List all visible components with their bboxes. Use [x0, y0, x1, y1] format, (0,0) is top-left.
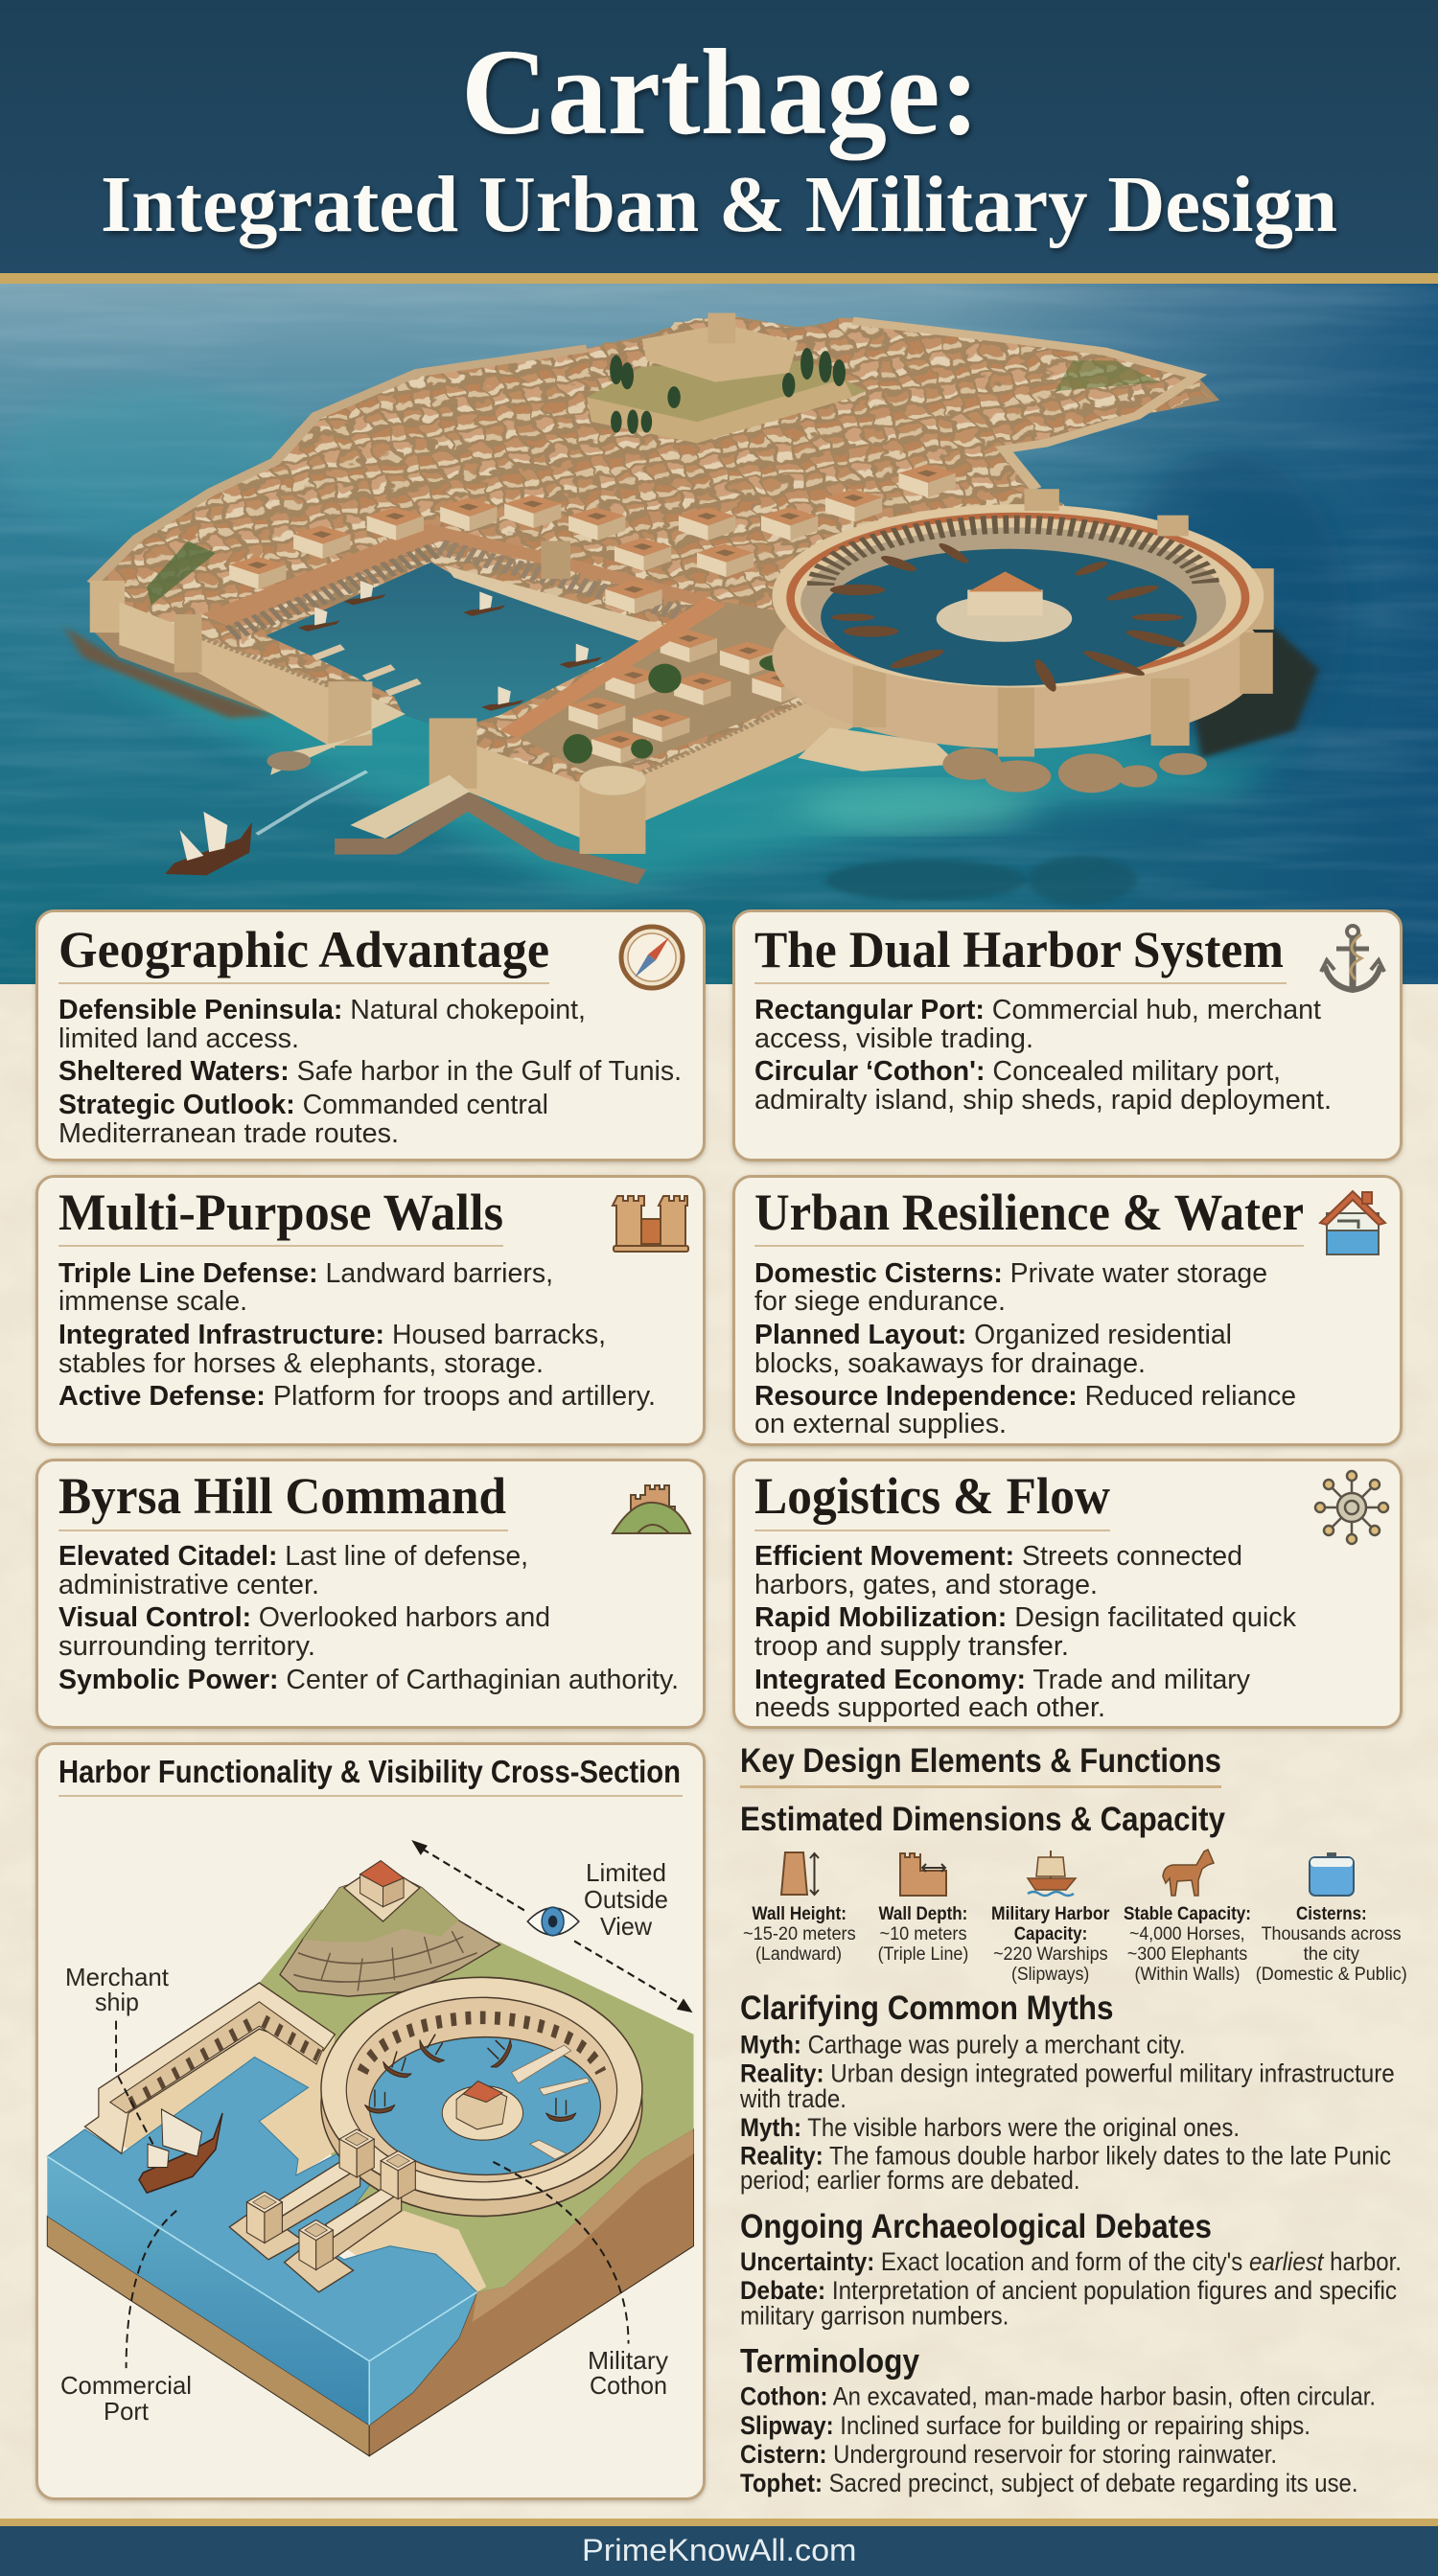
icon: castle walls — [613, 1196, 688, 1252]
south block and road — [518, 602, 848, 773]
icon: logistics wheel — [1315, 1471, 1388, 1544]
diagram labels: Merchant — [65, 1963, 170, 1991]
body text: Sheltered Waters: Safe harbor in the Gulf of Tunis. — [58, 1056, 682, 1087]
body text: Integrated Economy: Trade and military — [754, 1665, 1250, 1695]
body text: administrative center. — [58, 1570, 319, 1600]
section: terminology: Tophet: Sacred precinct, subject of debate regarding its use. — [740, 2469, 1357, 2497]
body text: Rectangular Port: Commercial hub, merchant — [754, 995, 1321, 1025]
body text: Efficient Movement: Streets connected — [754, 1541, 1242, 1572]
section: terminology: Cistern: Underground reservoir for storing rainwater. — [740, 2440, 1277, 2469]
diagram labels: View — [600, 1912, 652, 1941]
heading: Harbor Functionality & Visibility Cross-Section — [58, 1754, 681, 1789]
rocks — [942, 748, 1207, 793]
panel: urban resilience and water — [734, 1177, 1402, 1445]
citadel hill — [587, 360, 867, 443]
body text: on external supplies. — [754, 1409, 1007, 1439]
body text — [754, 1541, 1296, 1723]
rectangular port water — [266, 563, 679, 730]
body text: immense scale. — [58, 1286, 247, 1317]
hill — [280, 1872, 500, 1996]
metric: wall height — [743, 1852, 856, 1965]
section: ongoing archaeological debates: Ongoing Archaeological Debates — [740, 2208, 1212, 2245]
section: ongoing archaeological debates — [740, 2208, 1402, 2331]
panel: harbor cross-section — [36, 1744, 704, 2499]
diagram labels: Port — [104, 2397, 150, 2426]
panel: dual harbor system — [734, 910, 1402, 1160]
body text: needs supported each other. — [754, 1692, 1105, 1723]
heading: Geographic Advantage — [58, 921, 549, 978]
diagram labels: Military — [588, 2346, 668, 2375]
metric: cisterns: Cisterns: — [1296, 1904, 1367, 1924]
section: clarifying common myths: with trade. — [739, 2084, 847, 2113]
ships in port — [463, 591, 505, 616]
metric: wall depth: (Triple Line) — [878, 1944, 968, 1965]
diagram labels: Commercial — [60, 2371, 192, 2400]
leader lines — [116, 1849, 682, 2368]
body text — [58, 1258, 656, 1412]
body text: stables for horses & elephants, storage. — [58, 1348, 544, 1379]
merchant ship at sea — [257, 771, 367, 835]
heading: The Dual Harbor System — [754, 921, 1284, 978]
body text: admiralty island, ship sheds, rapid deployment. — [754, 1085, 1332, 1116]
body text — [58, 1541, 679, 1695]
diagram labels: Outside — [584, 1885, 668, 1914]
diagram labels: Limited — [586, 1858, 666, 1887]
commercial harbor walls — [85, 1983, 335, 2153]
gold band — [0, 273, 1438, 284]
ships in cothon — [830, 541, 1187, 693]
metric: stable capacity: (Within Walls) — [1135, 1965, 1241, 1985]
icon: compass — [621, 927, 683, 988]
body text: Active Defense: Platform for troops and artillery. — [58, 1381, 656, 1412]
body text — [58, 995, 682, 1149]
body text: Symbolic Power: Center of Carthaginian authority. — [58, 1665, 679, 1695]
body text: Elevated Citadel: Last line of defense, — [58, 1541, 528, 1572]
body text: Rapid Mobilization: Design facilitated quick — [754, 1602, 1296, 1633]
section: estimated dimensions — [740, 1801, 1407, 1985]
panel: byrsa hill command — [36, 1460, 704, 1727]
body text: Strategic Outlook: Commanded central — [58, 1090, 548, 1120]
diagram labels: Cothon — [590, 2371, 667, 2400]
subtitle: Integrated Urban & Military Design — [101, 160, 1337, 249]
admiralty island — [937, 595, 1072, 642]
hilltop building — [344, 1863, 420, 1921]
body text: troop and supply transfer. — [754, 1631, 1069, 1662]
terrain — [47, 2217, 369, 2456]
diagram labels — [60, 1858, 668, 2426]
section: terminology: Cothon: An excavated, man-made harbor basin, often circular. — [740, 2382, 1376, 2411]
body text: Circular ‘Cothon': Concealed military port, — [754, 1056, 1281, 1087]
metric: cisterns: the city — [1304, 1944, 1359, 1965]
body text: harbors, gates, and storage. — [754, 1570, 1098, 1600]
metric: wall height: ~15-20 meters — [743, 1924, 856, 1944]
parchment background — [0, 984, 1438, 2576]
section: ongoing archaeological debates: military garrison numbers. — [740, 2302, 1009, 2331]
section: clarifying common myths: Myth: Carthage was purely a merchant city. — [740, 2030, 1186, 2058]
section: key design elements heading: Key Design Elements & Functions — [740, 1742, 1221, 1780]
cothon — [772, 565, 1264, 748]
west walls and mole — [90, 581, 125, 632]
metric: wall depth — [878, 1853, 968, 1965]
metric: cisterns: (Domestic & Public) — [1256, 1965, 1407, 1985]
view arrowheads — [411, 1840, 693, 2012]
footer — [0, 2518, 1438, 2576]
body text: for siege endurance. — [754, 1286, 1006, 1317]
body text: limited land access. — [58, 1024, 299, 1054]
metric: stable capacity: Stable Capacity: — [1124, 1904, 1251, 1924]
cothon ships — [364, 2090, 395, 2113]
aerial illustration of Carthage — [0, 283, 1438, 984]
section: clarifying common myths: Clarifying Common Myths — [740, 1990, 1114, 2027]
metric: military harbor capacity: ~220 Warships — [993, 1944, 1108, 1965]
section: clarifying common myths — [739, 1990, 1395, 2195]
section: clarifying common myths: Myth: The visible harbors were the original ones. — [740, 2113, 1240, 2142]
body text: Integrated Infrastructure: Housed barracks, — [58, 1320, 606, 1350]
upper houses near harbors — [440, 498, 497, 531]
title: Carthage: — [461, 24, 980, 160]
sea — [47, 2058, 477, 2361]
panel: logistics and flow — [734, 1460, 1402, 1727]
metric: military harbor capacity — [991, 1851, 1110, 1985]
heading: Estimated Dimensions & Capacity — [740, 1801, 1225, 1838]
body text — [754, 995, 1332, 1116]
heading: Multi-Purpose Walls — [58, 1184, 503, 1241]
metric: wall height: (Landward) — [755, 1944, 842, 1965]
metric: wall depth: Wall Depth: — [878, 1904, 967, 1924]
heading: Byrsa Hill Command — [58, 1467, 506, 1525]
diagram labels: ship — [95, 1988, 139, 2016]
isometric harbor diagram — [47, 1840, 693, 2456]
body text: Triple Line Defense: Landward barriers, — [58, 1258, 553, 1289]
section: terminology — [740, 2342, 1376, 2497]
body text: access, visible trading. — [754, 1024, 1033, 1054]
panel: multi-purpose walls — [36, 1177, 704, 1445]
metric: wall depth: ~10 meters — [880, 1924, 966, 1944]
city land mass — [92, 314, 1238, 825]
metric: stable capacity: ~300 Elephants — [1127, 1944, 1247, 1965]
metric: wall height: Wall Height: — [752, 1904, 847, 1924]
cothon island — [442, 2086, 522, 2140]
body text: Planned Layout: Organized residential — [754, 1320, 1232, 1350]
metric: stable capacity: ~4,000 Horses, — [1129, 1924, 1245, 1944]
metric: cisterns: Thousands across — [1262, 1924, 1402, 1944]
metric: military harbor capacity: (Slipways) — [1011, 1965, 1089, 1985]
body text: Resource Independence: Reduced reliance — [754, 1381, 1296, 1412]
icon: hill citadel — [613, 1485, 690, 1533]
metric: cisterns — [1256, 1852, 1407, 1985]
section: ongoing archaeological debates: Uncertainty: Exact location and form of the city's earliest harbor. — [740, 2247, 1402, 2276]
metric: military harbor capacity: Capacity: — [1014, 1924, 1087, 1944]
heading: Urban Resilience & Water — [754, 1184, 1304, 1241]
body text: blocks, soakaways for drainage. — [754, 1348, 1146, 1379]
icon: house cistern — [1320, 1191, 1385, 1254]
body text — [754, 1258, 1296, 1439]
south walls — [335, 801, 642, 877]
port colonnades — [201, 522, 440, 627]
body text: Mediterranean trade routes. — [58, 1118, 399, 1149]
panel: geographic advantage — [36, 910, 704, 1160]
body text: surrounding territory. — [58, 1631, 315, 1662]
entrance jetties — [229, 2208, 303, 2260]
heading: Logistics & Flow — [754, 1467, 1110, 1525]
metric: military harbor capacity: Military Harbor — [991, 1904, 1110, 1924]
section: terminology: Slipway: Inclined surface for building or repairing ships. — [740, 2411, 1310, 2440]
section: clarifying common myths: period; earlier forms are debated. — [740, 2166, 1079, 2195]
body text: Domestic Cisterns: Private water storage — [754, 1258, 1267, 1289]
icon: anchor — [1321, 926, 1384, 990]
merchant ship — [139, 2113, 222, 2193]
body text: Defensible Peninsula: Natural chokepoint, — [58, 995, 586, 1025]
body text: Visual Control: Overlooked harbors and — [58, 1602, 550, 1633]
circular cothon — [321, 1993, 642, 2217]
footer site name: PrimeKnowAll.com — [582, 2533, 857, 2567]
metric: stable capacity — [1124, 1850, 1251, 1985]
section: terminology: Terminology — [740, 2342, 919, 2380]
icon: eye — [527, 1907, 579, 1936]
header banner — [0, 0, 1438, 284]
